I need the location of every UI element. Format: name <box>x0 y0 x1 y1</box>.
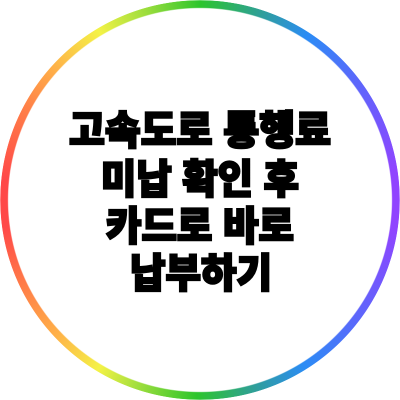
title: 납부하기 <box>130 252 272 296</box>
title: 고속도로 통행료 <box>69 109 331 153</box>
title: 미납 확인 후 <box>101 158 299 202</box>
title: 카드로 바로 <box>106 205 294 249</box>
